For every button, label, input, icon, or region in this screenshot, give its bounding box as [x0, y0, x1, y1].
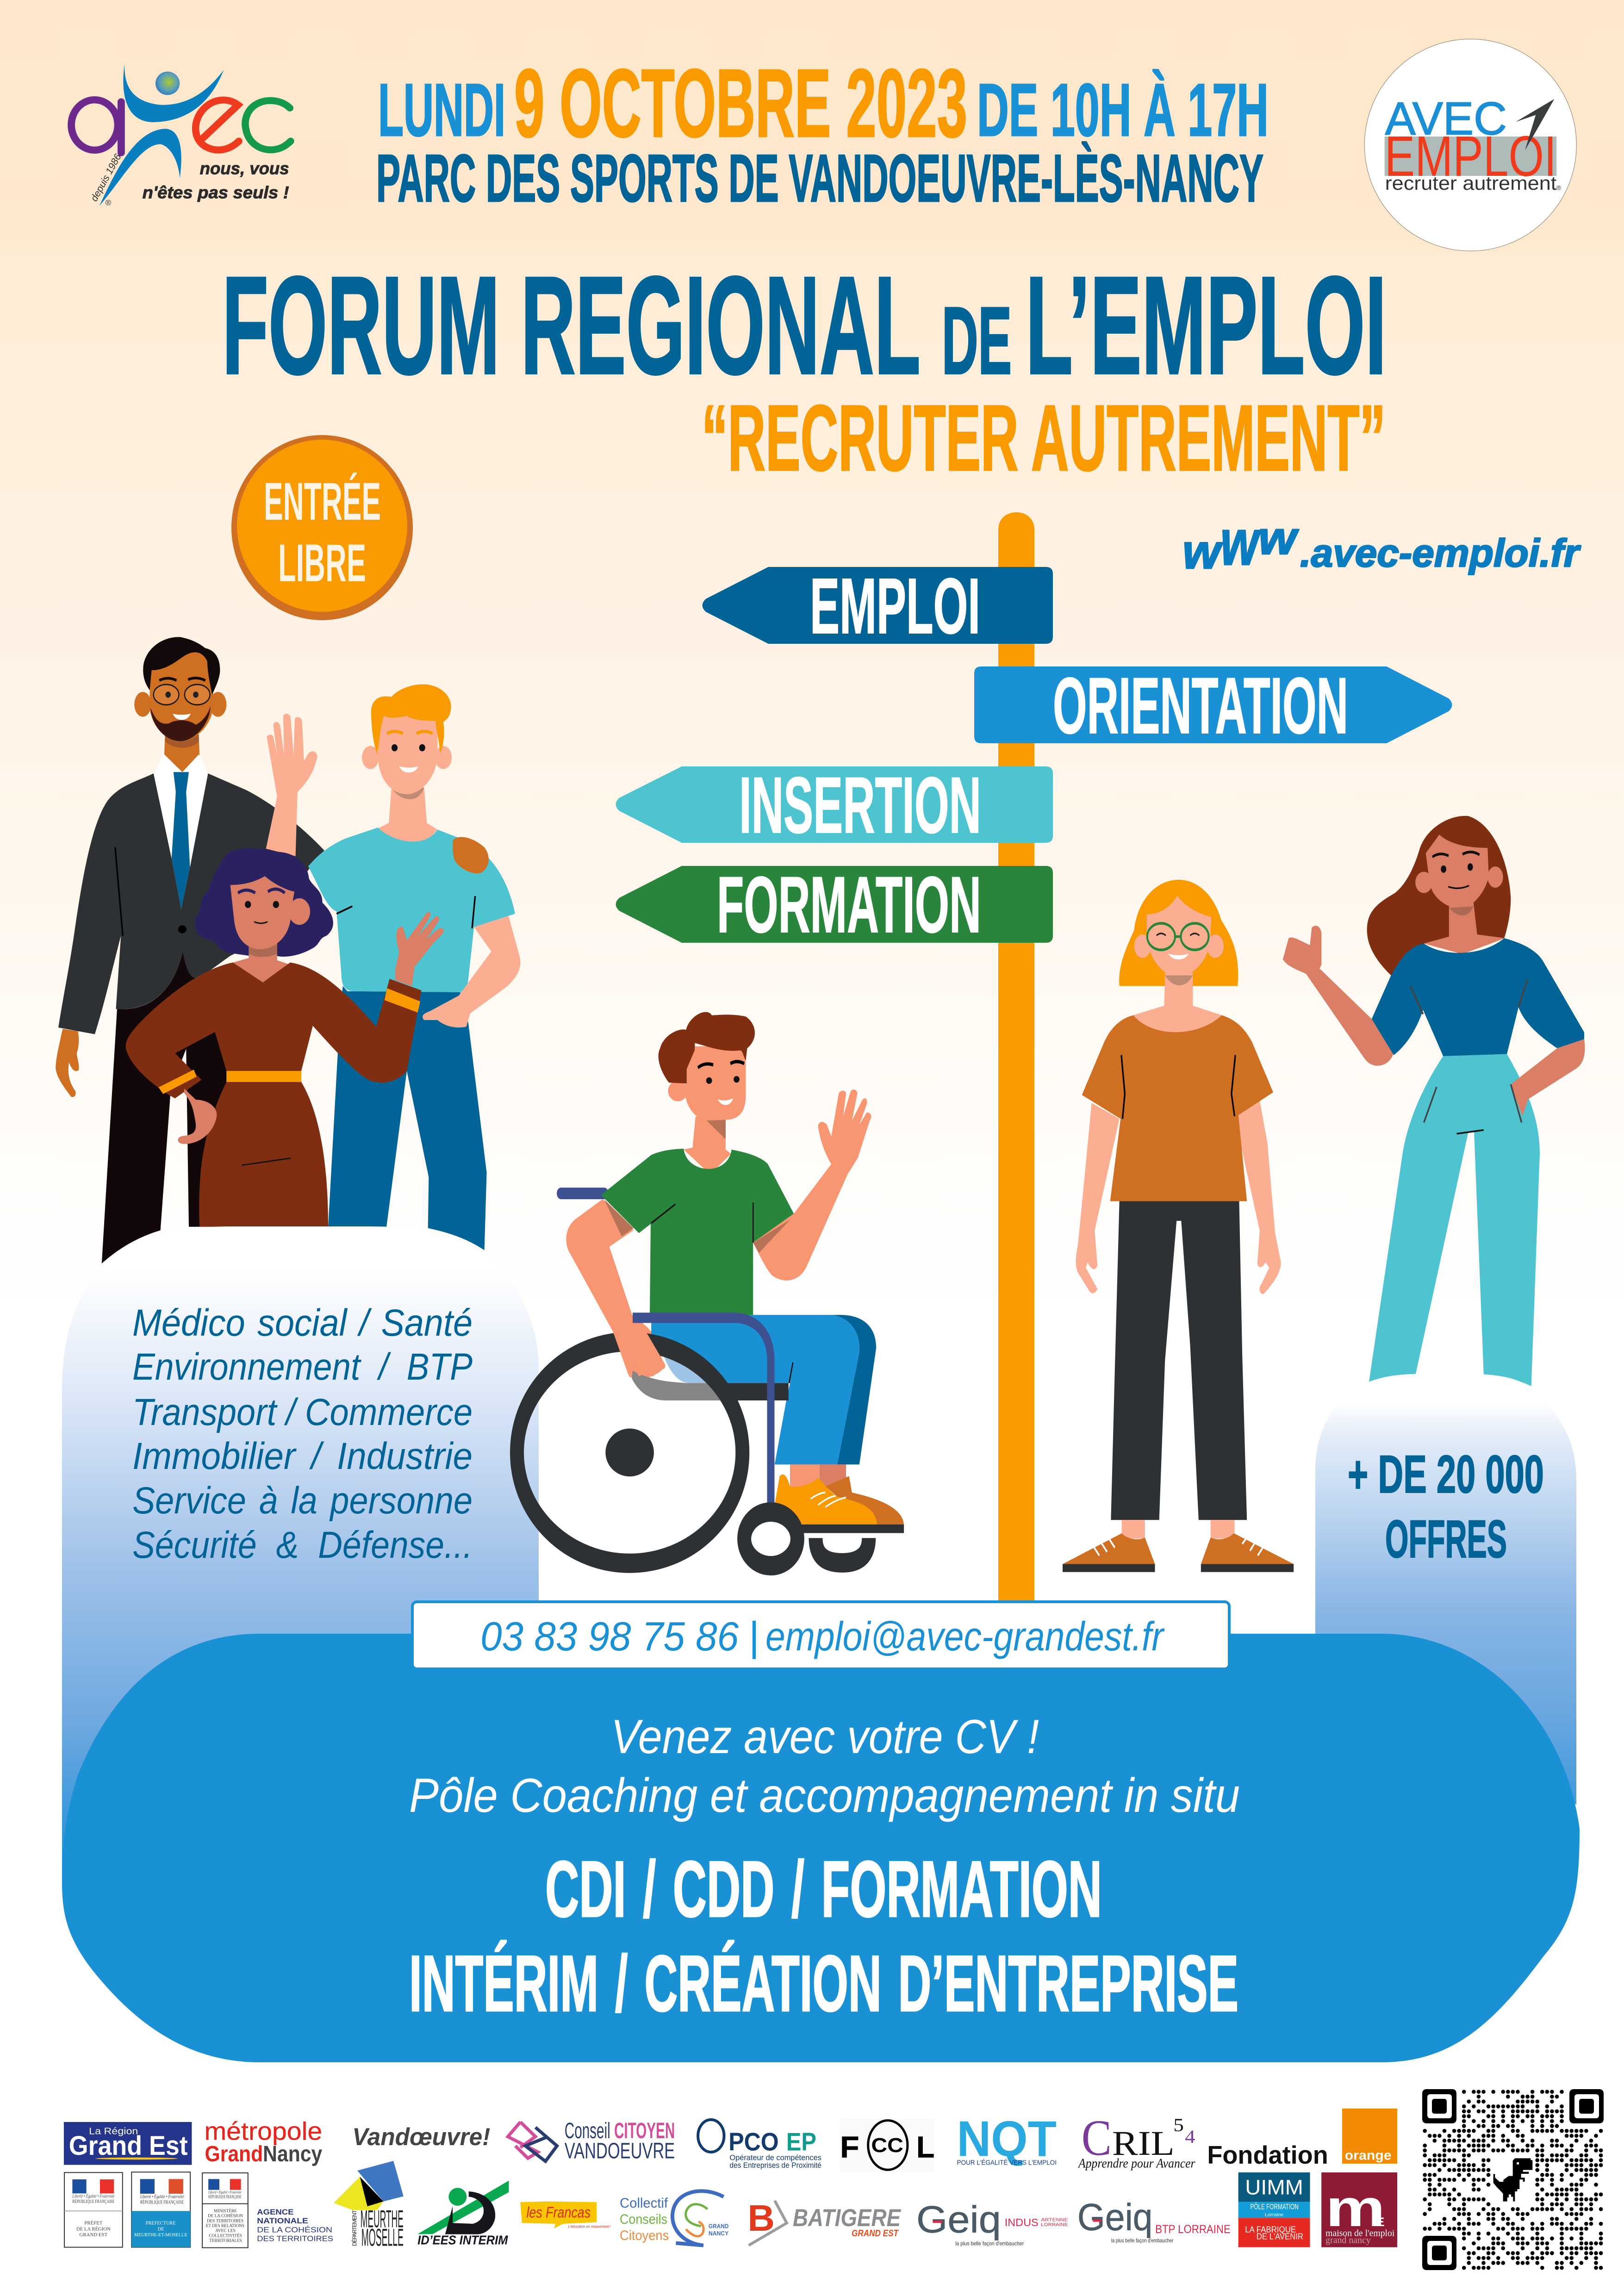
panel shape: [1315, 1374, 1576, 1805]
thigh and calf: [753, 1315, 876, 1464]
woman with glasses: [1063, 880, 1294, 1572]
logo: FCCL: [840, 2119, 934, 2172]
partner logos right: BTP LORRAINE: [1155, 2223, 1231, 2236]
QR modules: [1425, 2092, 1601, 2268]
badge: entrée libre: [231, 435, 413, 620]
logo: Département vertical label: DÉPARTEMENT: [351, 2209, 358, 2246]
partner logos left: GrandNancy: [205, 2141, 322, 2166]
text: grand nancy: [1325, 2235, 1371, 2245]
text: Opérateur de compétences: [729, 2153, 821, 2162]
logo: Agence nationale de la cohésion des territoires: NATIONALE: [257, 2216, 308, 2225]
sectors list: [132, 1302, 473, 1566]
partner logos left: Vandœuvre!: [352, 2123, 490, 2151]
logo: NQT: [957, 2110, 1057, 2167]
offers count: OFFRES: [1385, 1510, 1507, 1569]
logo: Préfecture Meurthe-et-Moselle: DE: [158, 2227, 164, 2232]
partner logos left: MEURTHE: [361, 2205, 404, 2233]
partner logos left: Liberté • Égalité • Fraternité: [72, 2194, 115, 2199]
logo: FCCL: F: [840, 2130, 859, 2164]
shoes: [825, 1476, 904, 1524]
registered mark: ®: [105, 199, 112, 207]
letter a: [71, 100, 121, 153]
logo: Geiq Indus: [916, 2198, 1068, 2246]
sign: emploi: [703, 562, 1053, 650]
sign: formation: [616, 860, 1053, 949]
logo: UIMM: Lorraine: [1265, 2212, 1283, 2217]
logo: AVEC association: [71, 64, 291, 207]
box: [412, 1602, 1229, 1669]
offers count: [1348, 1445, 1544, 1569]
sectors list: Environnement / BTP: [132, 1346, 473, 1388]
logo: Batigère name: BATIGERE: [793, 2204, 901, 2232]
logo: Les Francas: [520, 2202, 611, 2228]
partner logos left: DE LA COHÉSION: [257, 2225, 332, 2234]
partner logos left: PREFECTURE: [146, 2221, 176, 2226]
logo: Geiq Indus: Geiq: [916, 2198, 1001, 2240]
partner logos left: DE LA COHÉSION: [208, 2213, 243, 2218]
logo: Ministère cohésion des territoires: AVEC LES: [215, 2228, 236, 2233]
registered mark: ®: [1556, 184, 1562, 192]
website url: [1182, 506, 1581, 579]
partner logos right: la plus belle façon d'embaucher: [1111, 2237, 1173, 2244]
sign: insertion: INSERTION: [739, 761, 981, 850]
logo: UIMM: [1238, 2172, 1310, 2247]
woman with raised thumb: [1283, 816, 1585, 1386]
sectors list: Médico social / Santé: [132, 1302, 473, 1344]
logo: Geiq BTP Lorraine: [1077, 2196, 1231, 2244]
logo: Batigère name: GRAND EST: [852, 2228, 899, 2239]
partner logos left: TERRITORIALES: [209, 2238, 242, 2243]
date heading: 9 OCTOBRE 2023: [514, 50, 967, 157]
partner logos left: VANDOEUVRE: [565, 2138, 675, 2163]
partner logos right: NQT: [957, 2110, 1057, 2167]
partner logos left: Liberté • Égalité • Fraternité: [208, 2190, 242, 2194]
contact text: 03 83 98 75 86: [480, 1613, 739, 1659]
badge inner: [237, 440, 407, 612]
logo: Geiq Indus: INDUS: [1005, 2216, 1039, 2228]
partner logos left: Liberté • Égalité • Fraternité: [140, 2194, 184, 2199]
partner logos left: ET DES RELATIONS: [206, 2223, 244, 2228]
logo: Ministère cohésion des territoires: [202, 2173, 248, 2248]
logo: métropole Grand Nancy: [204, 2117, 322, 2166]
logo: Collectif Conseils Citoyens: Conseils: [620, 2211, 667, 2227]
partner logos left: L'éducation en mouvement !: [568, 2225, 610, 2228]
seat: [663, 1354, 719, 1383]
wheel: [517, 1342, 742, 1563]
globe: [156, 72, 180, 95]
partner logos left: MOSELLE: [361, 2224, 404, 2251]
partner logos right: LORRAINE: [1041, 2222, 1068, 2227]
slogan: nous, vous: [200, 159, 289, 178]
logo: OPCO EP: [698, 2120, 821, 2170]
partner logos left: DES TERRITOIRES: [257, 2234, 333, 2243]
partner logos left: RÉPUBLIQUE FRANÇAISE: [140, 2200, 184, 2205]
text: m: [1325, 2178, 1385, 2237]
back arm: [566, 1199, 665, 1379]
website url: w: [1220, 506, 1261, 579]
logo: FCCL: CC: [871, 2134, 903, 2156]
logo: Avec Emploi badge: [1364, 39, 1576, 251]
sign: orientation: ORIENTATION: [1053, 661, 1348, 750]
partner logos left: Grand Est: [69, 2130, 188, 2160]
website url: w: [1258, 512, 1300, 564]
QR dinosaur: [1493, 2158, 1532, 2202]
main title: FORUM REGIONAL: [222, 248, 921, 403]
logo: Geiq BTP Lorraine: Geiq: [1077, 2196, 1153, 2238]
logo: Batigère mark: [747, 2197, 787, 2246]
logo: Agence nationale de la cohésion des territoires: AGENCE: [257, 2208, 293, 2216]
partner logos left: GRAND: [709, 2223, 728, 2229]
hand on wheel: [613, 1323, 665, 1377]
badge text: LIBRE: [278, 534, 366, 593]
armrest: [557, 1188, 609, 1199]
partner logos right: la plus belle façon d'embaucher: [955, 2240, 1024, 2246]
text: orange: [1345, 2148, 1392, 2163]
contact text: [480, 1613, 1165, 1659]
arrow: [1516, 99, 1554, 150]
partner logos right: ARTENNE: [1041, 2217, 1068, 2222]
partner logos right: [840, 2109, 1397, 2247]
partner logos right: 4: [1185, 2127, 1195, 2147]
website url: .avec-emploi.fr: [1300, 531, 1581, 575]
date heading: DE 10H À 17H: [977, 68, 1269, 152]
partner logos left: MINISTÈRE: [214, 2209, 237, 2213]
neck: [684, 1117, 731, 1175]
partner logos left: les Francas: [526, 2203, 591, 2221]
main title: DE: [942, 287, 1012, 394]
caster wheels: [744, 1512, 797, 1566]
panel: sectors left: [62, 1226, 539, 1874]
logo: Grand Est: La Région: [89, 2126, 138, 2136]
sign: formation: FORMATION: [717, 860, 981, 949]
invitation text: [409, 1710, 1240, 1823]
text: des Entreprises de Proximité: [729, 2161, 821, 2170]
man in suit: [56, 637, 324, 1263]
finder patterns: [1422, 2089, 1604, 2270]
logo: Collectif Conseils Citoyens: [620, 2191, 728, 2246]
partner logos left: B: [747, 2197, 775, 2239]
partner logos right: LA FABRIQUE: [1245, 2225, 1296, 2234]
tagline: recruter autrement: [1385, 172, 1557, 194]
badge outer: [231, 435, 413, 620]
partner logos right: POUR L'ÉGALITÉ VERS L'EMPLOI: [957, 2159, 1057, 2166]
logo: Préfet de région: PRÉFET: [84, 2221, 103, 2226]
partner logos right: Apprendre pour Avancer: [1078, 2156, 1195, 2171]
sectors list: Transport / Commerce: [132, 1391, 473, 1433]
partner logos right: UIMM: [1245, 2176, 1303, 2199]
sectors list: Service à la personne: [132, 1480, 473, 1522]
logo: Maison de l'emploi: [1321, 2172, 1397, 2247]
partner logos left: MEURTHE-ET-MOSELLE: [134, 2233, 187, 2237]
logo: Maison de l'emploi: E: [1373, 2215, 1385, 2229]
logo: Grand Est: [64, 2122, 192, 2165]
background top band: [0, 0, 1624, 252]
partner logos left: NANCY: [709, 2230, 728, 2237]
partner logos right: PÔLE FORMATION: [1250, 2202, 1299, 2211]
text: Fondation: [1207, 2140, 1328, 2169]
text: EP: [786, 2128, 816, 2156]
contact text: emploi@avec-grandest.fr: [765, 1613, 1165, 1659]
badge text: [264, 472, 381, 593]
website url: w: [1182, 525, 1223, 579]
blue panel: call to action: [62, 1634, 1580, 2062]
logo: Préfet de région: [64, 2172, 123, 2247]
logo: Collectif Conseils Citoyens: Citoyens: [620, 2228, 669, 2243]
partner logos right: RIL: [1112, 2124, 1175, 2162]
badge circle: [1364, 39, 1576, 251]
sign: emploi: EMPLOI: [810, 562, 980, 650]
text: maison de l'emploi: [1325, 2228, 1394, 2238]
footrest: [802, 1524, 904, 1533]
signpost pole: [998, 512, 1034, 1606]
invitation text: Pôle Coaching et accompagnement in situ: [409, 1769, 1240, 1823]
sectors list: Sécurité & Défense...: [132, 1524, 473, 1566]
logo: Conseil citoyen: [508, 2118, 675, 2163]
partner logos left: RÉPUBLIQUE FRANÇAISE: [72, 2199, 114, 2204]
logo: Agence nationale de la cohésion des territoires: [257, 2208, 333, 2243]
woman in brown dress: [126, 848, 444, 1227]
invitation text: Venez avec votre CV !: [611, 1710, 1039, 1764]
partner logos left: DE LA RÉGION: [76, 2227, 111, 2232]
logo: Préfecture Meurthe-et-Moselle: [131, 2172, 190, 2247]
sign: insertion: [616, 761, 1053, 850]
blond man: [266, 684, 520, 1250]
logo: Collectif Conseils Citoyens: Collectif: [620, 2195, 668, 2210]
partner logos left: RÉPUBLIQUE FRANÇAISE: [208, 2194, 242, 2199]
figure body: [100, 64, 224, 206]
logo: CRIL 54: C: [1082, 2110, 1112, 2166]
letters e and c: [196, 100, 291, 150]
logo: OPCO EP: PCO: [728, 2128, 779, 2156]
grey band: [1385, 137, 1556, 176]
AVEC word: AVEC: [1385, 93, 1507, 145]
panel: offers right: [1315, 1374, 1576, 1805]
partner logos left: [64, 2117, 821, 2251]
logo: Préfet de région: GRAND EST: [80, 2233, 107, 2237]
badge text: ENTRÉE: [264, 472, 381, 531]
contract types: [409, 1845, 1238, 2028]
head: [668, 1081, 688, 1101]
panel shape: [62, 1226, 539, 1874]
logo: Département Meurthe et Moselle: [334, 2161, 404, 2251]
contract types: CDI / CDD / FORMATION: [545, 1845, 1102, 1934]
sign: orientation: [974, 661, 1452, 750]
QR code: [1422, 2089, 1604, 2270]
shirt: [601, 1149, 794, 1315]
EMPLOI word: EMPLOI: [1385, 124, 1556, 188]
partner logos left: Conseil CITOYEN: [565, 2118, 675, 2143]
logo: ID'EES Interim: [417, 2181, 509, 2247]
partner logos left: COLLECTIVITÉS: [209, 2233, 242, 2238]
partner logos left: métropole: [204, 2117, 322, 2145]
partner logos left: ID’EES INTERIM: [417, 2233, 508, 2247]
slogan: n'êtes pas seuls !: [143, 183, 289, 202]
contact text: |: [749, 1613, 759, 1659]
partner logos right: DE L'AVENIR: [1257, 2232, 1303, 2241]
partner logos right: L: [916, 2130, 934, 2164]
sectors list: Immobilier / Industrie: [132, 1435, 473, 1477]
date heading: LUNDI: [378, 68, 505, 152]
people group: three colleagues: [56, 637, 520, 1263]
man in wheelchair: [517, 1012, 904, 1566]
slogan: [143, 159, 289, 202]
partner logos left: DES TERRITOIRES: [207, 2218, 243, 2223]
logo: CRIL 54: 5: [1173, 2115, 1184, 2135]
contact box: [412, 1602, 1229, 1669]
waving arm: [753, 1089, 871, 1281]
since 1986: depuis 1986: [89, 152, 124, 203]
ankles: [790, 1464, 820, 1488]
frame: [633, 1318, 771, 1507]
logo: Fondation Orange: [1207, 2109, 1397, 2169]
